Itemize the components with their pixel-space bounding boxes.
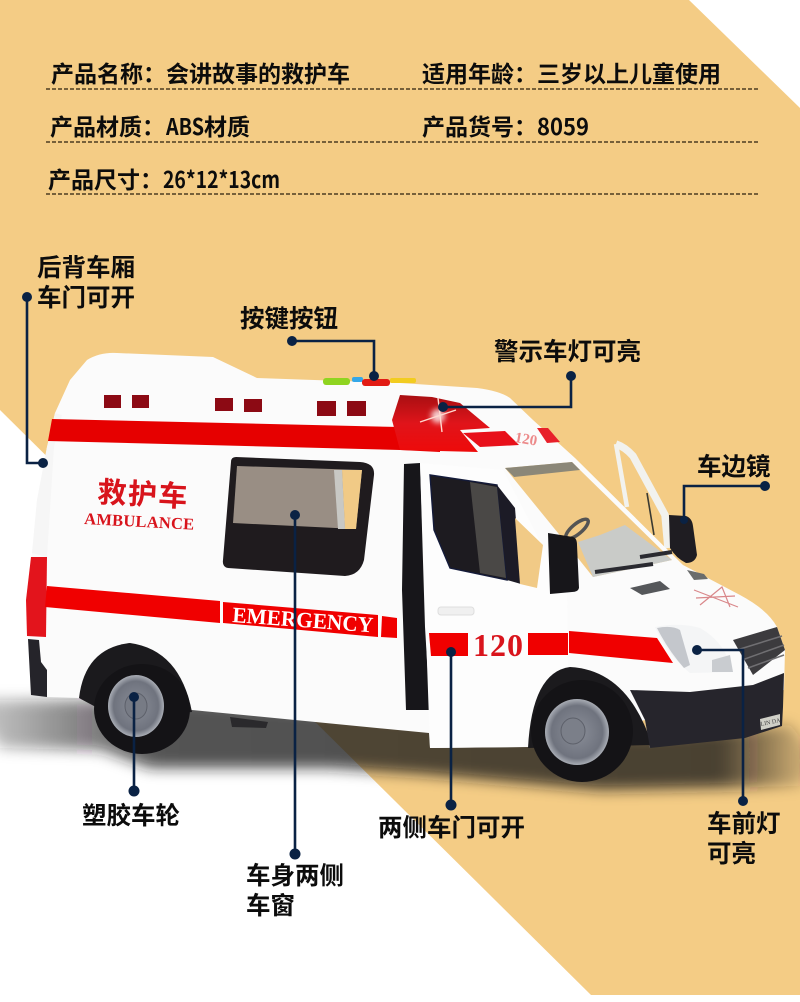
spec: material: 产品材质： bbox=[50, 108, 165, 142]
spec: size bbox=[48, 161, 280, 195]
front wheel bbox=[531, 680, 633, 782]
upper red stripe bbox=[48, 419, 440, 452]
callout: wheels bbox=[82, 692, 180, 832]
spec: material bbox=[50, 108, 250, 142]
side window bbox=[223, 457, 374, 576]
emergency stripe bbox=[223, 602, 397, 638]
red warning lamp bbox=[392, 395, 560, 452]
windshield bbox=[505, 462, 672, 577]
text: EMERGENCY: EMERGENCY bbox=[232, 602, 374, 637]
callout: side windows bbox=[246, 510, 344, 922]
callout: side doors bbox=[378, 647, 525, 844]
near side mirror bbox=[548, 533, 579, 594]
spec: item number: 产品货号： bbox=[422, 108, 537, 142]
side logo bbox=[84, 469, 195, 534]
callout: headlight: 可亮 bbox=[707, 835, 756, 870]
ambulance bbox=[26, 353, 785, 782]
spec: product name: 产品名称：会讲故事的救护车 bbox=[51, 55, 350, 89]
spec: suitable age: 适用年龄：三岁以上儿童使用 bbox=[422, 55, 721, 89]
far side mirror bbox=[669, 515, 697, 563]
callout: side doors: 两侧车门可开 bbox=[378, 809, 525, 844]
spec: item number bbox=[422, 108, 589, 142]
spec: material: 材质 bbox=[204, 108, 250, 142]
open far door frame bbox=[616, 444, 668, 548]
callout: warning light bbox=[438, 333, 641, 412]
license plate bbox=[760, 714, 782, 730]
rear bumper bbox=[28, 639, 47, 697]
underbody bbox=[230, 717, 268, 728]
door window bbox=[430, 475, 507, 580]
van body bbox=[28, 353, 785, 748]
label second line: 车门可开 bbox=[37, 279, 135, 314]
hood emblem bbox=[694, 587, 738, 607]
lamp sparkle bbox=[420, 398, 456, 432]
callout: side windows: 车窗 bbox=[246, 887, 295, 922]
callout: wheels: 塑胶车轮 bbox=[82, 797, 180, 832]
text: 120: 120 bbox=[473, 627, 523, 663]
headlight bbox=[655, 625, 733, 673]
quarter glass bbox=[515, 518, 543, 588]
lower red stripe bbox=[45, 586, 220, 623]
callout: headlight bbox=[692, 645, 780, 870]
rear wheel bbox=[94, 664, 190, 754]
front bumper bbox=[630, 673, 784, 748]
rear edge shading bbox=[32, 413, 62, 557]
callout: side windows: 车身两侧 bbox=[246, 857, 344, 892]
open side door bbox=[420, 463, 568, 748]
callout: buttons: 按键按钮 bbox=[240, 300, 338, 335]
top buttons bbox=[323, 377, 416, 386]
door gap bbox=[402, 463, 430, 710]
callout: buttons bbox=[240, 300, 379, 381]
front wheel arch bbox=[528, 667, 652, 748]
license plate: LIN DA bbox=[760, 718, 782, 728]
wheel arch rear bbox=[79, 643, 192, 720]
tail lamp bbox=[26, 557, 47, 637]
text: AMBULANCE: AMBULANCE bbox=[84, 509, 195, 534]
product specification table bbox=[46, 55, 759, 195]
callout: rear door bbox=[22, 249, 135, 468]
front fender stripe bbox=[569, 631, 673, 663]
spec: material: ABS bbox=[165, 108, 204, 142]
door handle bbox=[438, 607, 474, 615]
spec: size: 产品尺寸： bbox=[48, 161, 163, 195]
spec: item number: 8059 bbox=[537, 108, 589, 142]
label: 后背车厢 bbox=[37, 249, 135, 284]
roof small windows bbox=[104, 395, 366, 416]
grille bbox=[733, 627, 785, 675]
callout: side mirror: 车边镜 bbox=[697, 448, 770, 483]
callout: headlight: 车前灯 bbox=[707, 805, 780, 840]
hood vents bbox=[630, 581, 670, 595]
small number 120: 120 bbox=[513, 430, 538, 450]
ground shadow bbox=[0, 700, 800, 790]
text: 救护车: 救护车 bbox=[97, 469, 190, 516]
door red stripes bbox=[429, 633, 468, 656]
callout: warning light: 警示车灯可亮 bbox=[494, 333, 641, 368]
callout: side mirror bbox=[680, 448, 770, 524]
spec: size: 26*12*13cm bbox=[163, 161, 280, 195]
